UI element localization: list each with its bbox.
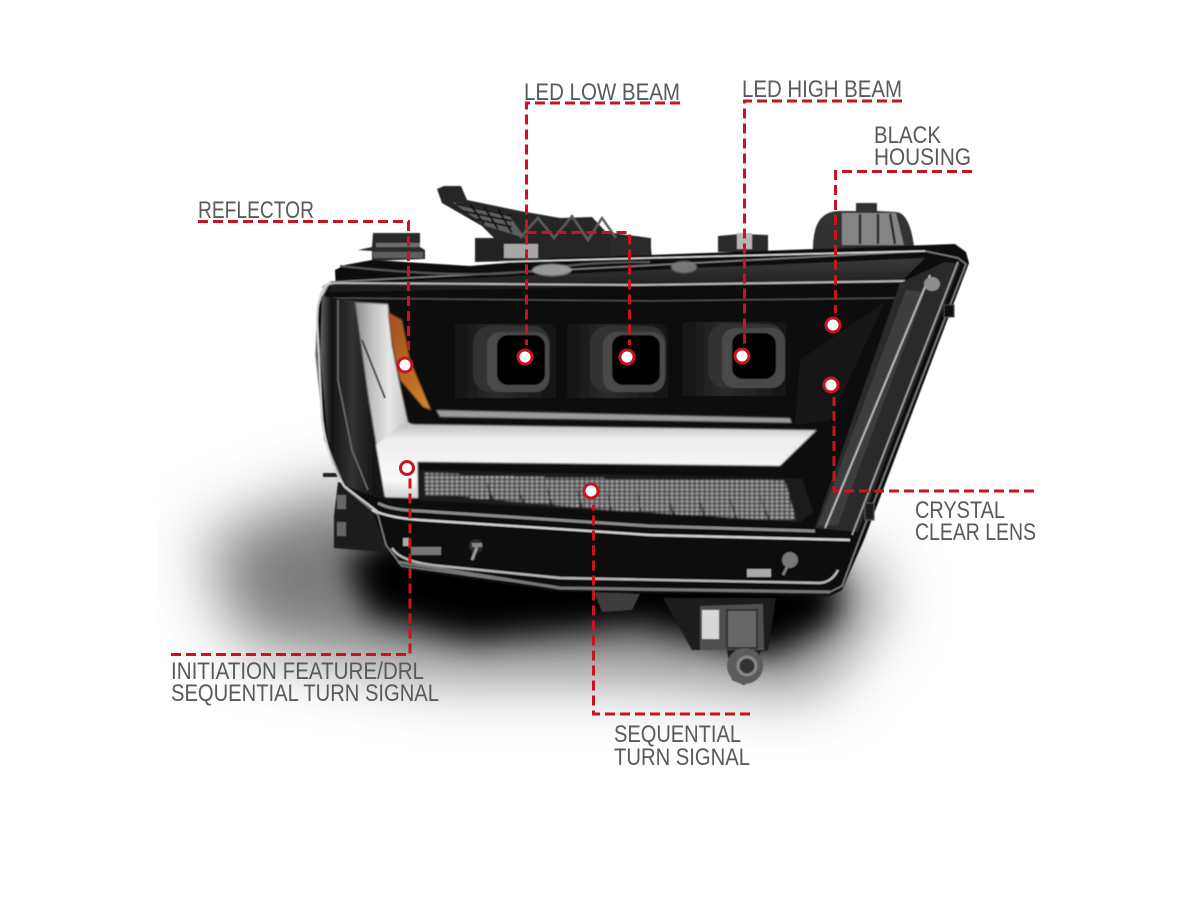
main black body [335, 244, 969, 596]
initiation light strip [355, 302, 418, 498]
callout: sequential turn signal [584, 484, 750, 771]
left top clip [358, 233, 425, 261]
callout: crystal clear lens: CLEAR LENS [915, 519, 1036, 546]
top lens band [330, 258, 925, 292]
callout: LED high beam: LED HIGH BEAM [742, 76, 902, 103]
callout: LED high beam [735, 76, 902, 363]
ground shadow [205, 490, 885, 690]
thin strip under projectors [436, 410, 792, 423]
left glass area [320, 296, 384, 500]
callout: LED low beam [518, 79, 680, 364]
callout: initiation feature and DRL sequential turn signal [171, 462, 439, 707]
chrome lens lines [322, 251, 925, 301]
callout: initiation feature and DRL sequential turn signal: SEQUENTIAL TURN SIGNAL [171, 680, 439, 707]
callout: reflector [198, 197, 412, 372]
callout: black housing: HOUSING [874, 144, 971, 171]
turn signal LED panel [420, 470, 813, 522]
projector: low beam [448, 324, 556, 398]
projector: high beam [675, 322, 786, 396]
callout: black housing: BLACK [874, 122, 941, 149]
DRL light bar [376, 424, 817, 498]
callout: crystal clear lens: CRYSTAL [915, 497, 1005, 524]
callout: LED low beam: LED LOW BEAM [524, 79, 680, 106]
callout: crystal clear lens [824, 378, 1036, 546]
lens bottom chrome strips [372, 503, 850, 540]
small screws on top band [532, 261, 697, 276]
callout: black housing [826, 122, 972, 332]
amber reflector [388, 312, 431, 410]
lower bracket [594, 592, 776, 685]
headlight assembly [316, 186, 969, 685]
lower left mounts [323, 473, 384, 552]
middle top clip [718, 233, 768, 252]
top mounting bracket [437, 186, 652, 262]
callout: sequential turn signal: TURN SIGNAL [614, 744, 750, 771]
right lens frame [815, 262, 960, 535]
projector: center [560, 324, 668, 398]
lower screws [403, 538, 798, 577]
outer lens rim [316, 251, 966, 592]
callout: sequential turn signal: SEQUENTIAL [614, 721, 741, 748]
right interior reflection [795, 302, 885, 425]
callout: initiation feature and DRL sequential turn signal: INITIATION FEATURE/DRL [171, 658, 424, 685]
callout: reflector: REFLECTOR [198, 197, 314, 224]
bottom black panel [398, 524, 835, 581]
bottom chrome strips [392, 548, 838, 592]
left chrome rim [317, 282, 378, 512]
dark inner streak [362, 340, 385, 398]
round connector cap [813, 203, 914, 250]
